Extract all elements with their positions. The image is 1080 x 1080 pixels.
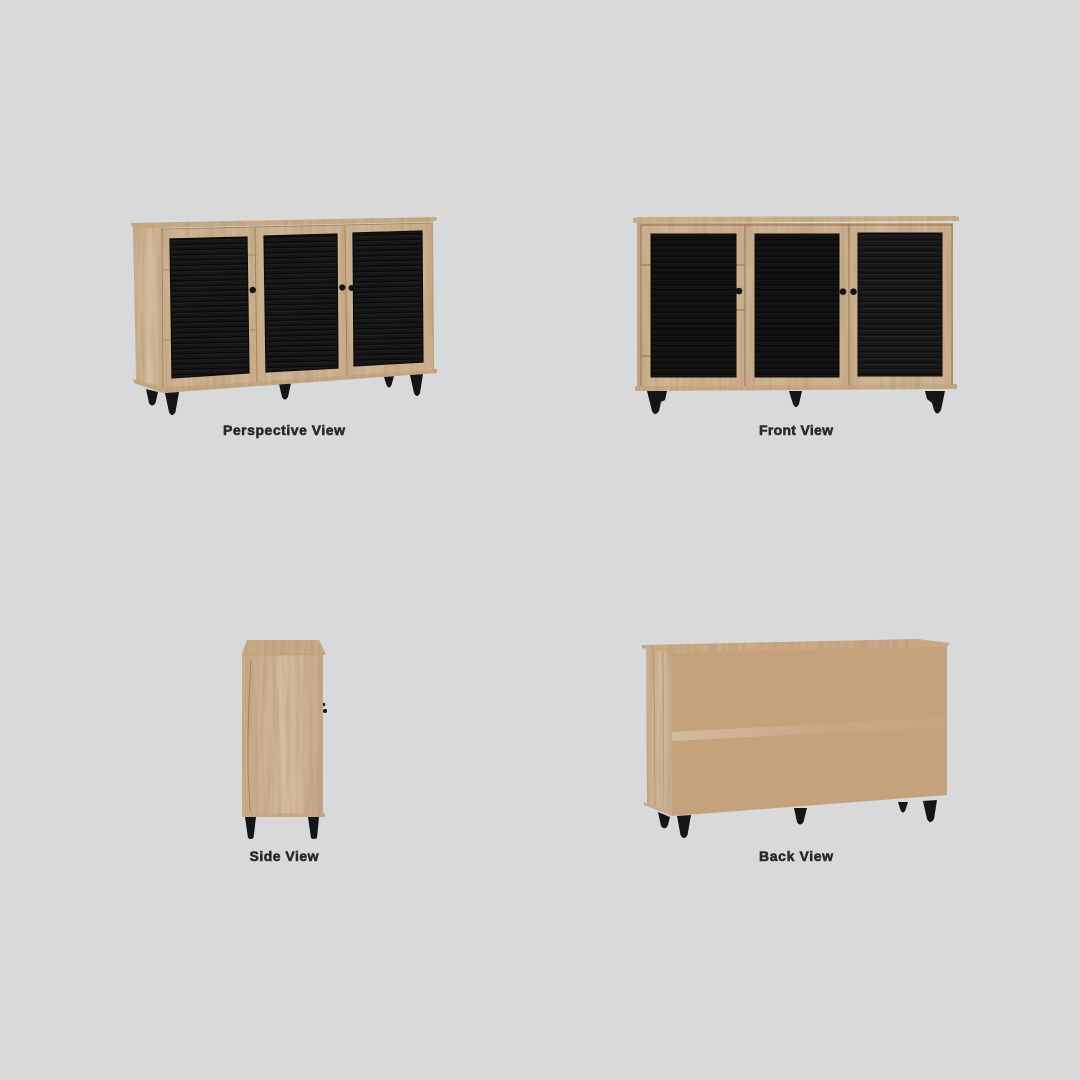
label: front view: Front View xyxy=(759,422,833,438)
centre strip xyxy=(672,717,947,741)
wood body: side view xyxy=(242,640,325,817)
door right xyxy=(849,224,952,385)
cabinet: back view xyxy=(642,639,950,838)
base board xyxy=(635,384,957,391)
cabinet: perspective view xyxy=(131,217,437,415)
cabinet: front view xyxy=(633,216,959,414)
knobs: side view xyxy=(322,703,327,713)
top surface xyxy=(242,640,325,653)
louver right xyxy=(353,231,423,366)
side grooves xyxy=(654,650,664,811)
door middle xyxy=(745,225,849,386)
top slab xyxy=(642,639,950,653)
side panel xyxy=(646,648,673,815)
door right xyxy=(345,223,433,375)
knobs xyxy=(736,288,857,295)
louver right xyxy=(858,233,942,376)
cabinet: side view xyxy=(242,640,327,839)
door seams xyxy=(162,223,431,387)
louver middle xyxy=(264,234,338,372)
base board xyxy=(242,813,325,817)
door seams xyxy=(641,224,952,386)
strip at right of body xyxy=(431,222,434,370)
back panel xyxy=(672,645,947,816)
label: perspective view: Perspective View xyxy=(223,422,345,438)
body xyxy=(637,223,953,386)
base board xyxy=(133,369,437,393)
side panel xyxy=(133,226,164,388)
knobs xyxy=(250,284,354,293)
legs: back view xyxy=(658,800,937,838)
louver left xyxy=(651,234,736,377)
wood grain crack xyxy=(248,660,251,812)
louver middle xyxy=(755,234,839,377)
top slab xyxy=(633,216,959,223)
side panel xyxy=(242,655,323,813)
door left xyxy=(162,227,257,387)
base boards xyxy=(644,802,672,816)
louver left xyxy=(170,237,249,378)
label: side view: Side View xyxy=(250,848,319,864)
legs: perspective view xyxy=(146,374,423,415)
top front edge xyxy=(242,652,325,656)
label: back view: Back View xyxy=(759,848,833,864)
door left xyxy=(641,225,745,386)
top slab xyxy=(131,217,437,228)
wood body: perspective view xyxy=(131,217,437,393)
legs: side view xyxy=(245,817,319,839)
wood body: front view xyxy=(633,216,959,391)
door middle xyxy=(255,225,347,382)
legs: front view xyxy=(647,391,945,414)
